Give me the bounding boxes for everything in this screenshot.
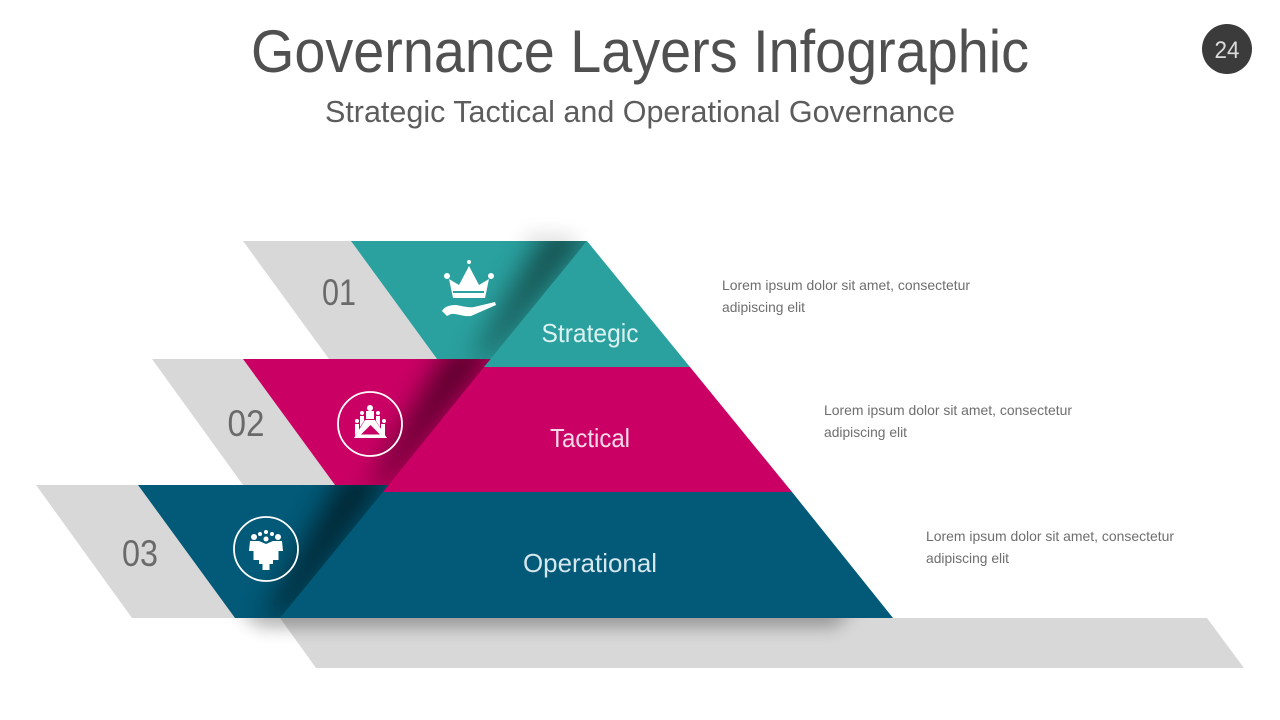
panel: tactical layer bbox=[152, 359, 792, 492]
number tab 01: 01 bbox=[322, 272, 356, 313]
text block: operational description: adipiscing elit bbox=[926, 550, 1009, 566]
icon: crown on hand bbox=[442, 260, 496, 316]
navy fold bbox=[138, 485, 389, 618]
text block: strategic description: adipiscing elit bbox=[722, 299, 805, 315]
icon: boardroom bbox=[338, 392, 402, 456]
number tab 03: 03 bbox=[122, 533, 158, 574]
text block: tactical description: adipiscing elit bbox=[824, 424, 907, 440]
text block: strategic description bbox=[722, 277, 970, 315]
label: Operational: Operational bbox=[523, 548, 657, 578]
navy front bbox=[280, 492, 893, 618]
label: Tactical: Tactical bbox=[550, 423, 630, 453]
number tab 01 bbox=[243, 241, 437, 359]
label: Strategic: Strategic bbox=[542, 318, 638, 348]
magenta front bbox=[383, 367, 792, 492]
title: Governance Layers Infographic bbox=[251, 18, 1029, 85]
text block: operational description: Lorem ipsum dolor sit amet, consectetur bbox=[926, 528, 1174, 544]
teal fold bbox=[351, 241, 587, 359]
text block: operational description bbox=[926, 528, 1174, 566]
top shadow bbox=[523, 229, 577, 241]
number tab 03 bbox=[36, 485, 235, 618]
page number badge bbox=[1202, 24, 1252, 74]
number tab 02: 02 bbox=[228, 403, 264, 444]
magenta fold bbox=[243, 359, 490, 485]
teal front bbox=[484, 241, 690, 367]
base shelf bbox=[236, 618, 1244, 668]
text block: tactical description bbox=[824, 402, 1072, 440]
subtitle: Strategic Tactical and Operational Governance bbox=[325, 94, 955, 129]
text block: tactical description: Lorem ipsum dolor sit amet, consectetur bbox=[824, 402, 1072, 418]
panel: operational layer bbox=[36, 485, 893, 618]
page number badge: 24 bbox=[1214, 37, 1240, 64]
icon: crowd of people bbox=[234, 517, 298, 581]
number tab 02 bbox=[152, 359, 335, 485]
text block: strategic description: Lorem ipsum dolor sit amet, consectetur bbox=[722, 277, 970, 293]
panel: strategic layer bbox=[243, 226, 690, 368]
